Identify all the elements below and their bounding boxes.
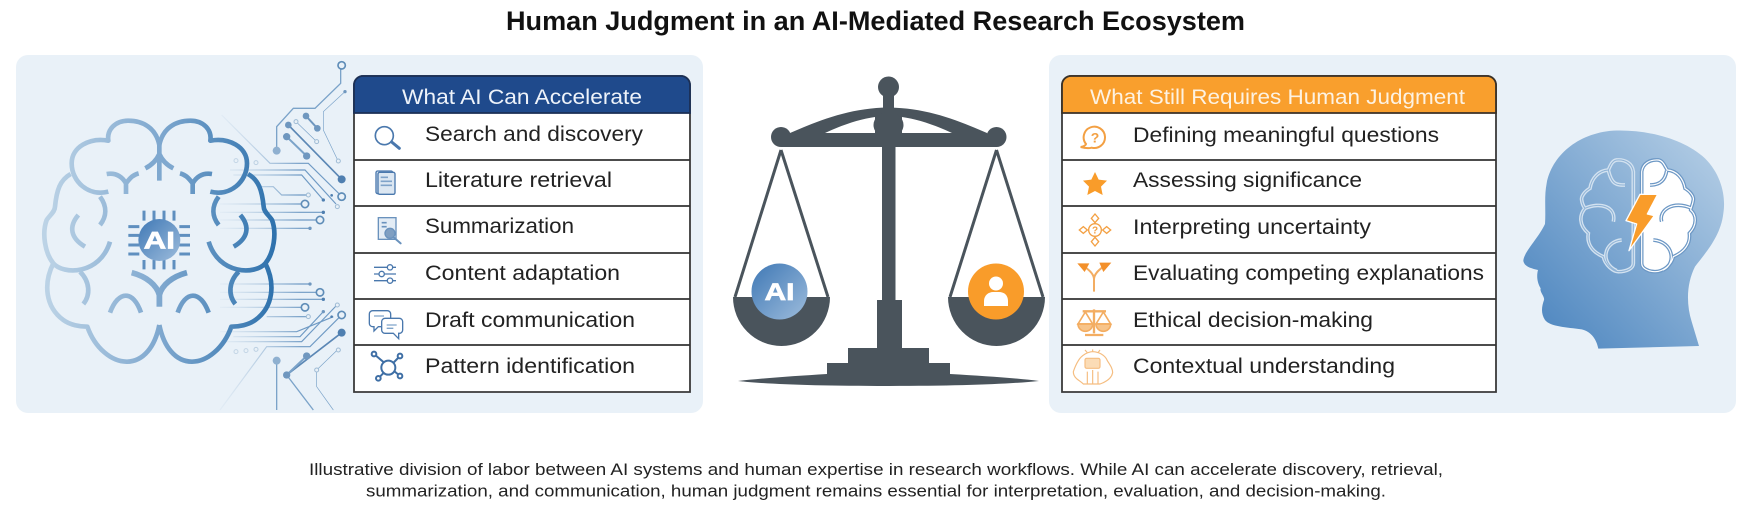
icon: balance scale	[733, 76, 1045, 386]
icon: speech bubbles	[369, 311, 403, 339]
icon: diverging arrows	[1077, 263, 1111, 292]
row: contextual understanding	[1073, 349, 1395, 384]
row: search and discovery: Search and discovery	[425, 122, 643, 146]
icon: network	[372, 352, 402, 381]
table header: What AI Can Accelerate	[402, 86, 642, 109]
row: pattern identification	[372, 352, 635, 381]
icon: small scales	[1078, 309, 1111, 335]
stepped base	[738, 300, 1039, 386]
AI weight: AI	[764, 279, 794, 306]
illustration: human head with brain	[1523, 131, 1724, 349]
left pan	[733, 150, 830, 346]
lightning bolt	[1626, 194, 1658, 251]
row: literature retrieval: Literature retrieval	[425, 168, 612, 192]
row: interpreting uncertainty	[1079, 214, 1371, 246]
icon: question bubble: ?	[1091, 130, 1099, 146]
row: draft communication	[369, 308, 635, 339]
icon: uncertainty compass: ?	[1092, 226, 1098, 237]
icon: uncertainty compass	[1079, 214, 1111, 246]
icon: question bubble	[1081, 127, 1105, 148]
illustration: AI brain with circuits	[44, 62, 347, 410]
row: contextual understanding: Contextual understanding	[1133, 354, 1395, 378]
right pan	[948, 150, 1045, 346]
head silhouette	[1523, 131, 1724, 349]
caption: Illustrative division of labor between AI systems and human expertise in research workflows. While AI can accelerate discovery, retrieval,	[309, 461, 1443, 479]
human weight	[968, 264, 1024, 320]
AI chip: AI	[144, 228, 175, 255]
icon: sliders	[374, 265, 396, 283]
table header: What Still Requires Human Judgment	[1090, 86, 1465, 109]
row: assessing significance	[1083, 168, 1362, 195]
AI weight	[752, 264, 808, 320]
icon: brain in head	[1073, 349, 1113, 384]
icon: document with magnifier	[378, 218, 401, 243]
row: ethical decision-making	[1078, 308, 1373, 335]
row: draft communication: Draft communication	[425, 308, 635, 332]
row: defining meaningful questions: Defining meaningful questions	[1133, 123, 1439, 147]
panel: what still requires human judgment	[1049, 55, 1736, 413]
table: what AI can accelerate	[354, 76, 690, 392]
brain: left hemisphere	[44, 121, 159, 362]
AI chip	[128, 211, 190, 269]
row: evaluating competing explanations: Evaluating competing explanations	[1133, 261, 1484, 285]
table: human judgment	[1062, 76, 1496, 392]
caption: summarization, and communication, human judgment remains essential for interpretation, evaluation, and decision-making.	[366, 482, 1386, 500]
row: ethical decision-making: Ethical decision-making	[1133, 308, 1373, 332]
table header	[1062, 76, 1496, 113]
row: pattern identification: Pattern identification	[425, 354, 635, 378]
brain: right half	[1642, 160, 1695, 272]
row: content adaptation: Content adaptation	[425, 261, 620, 285]
caption	[309, 461, 1443, 500]
title: Human Judgment in an AI-Mediated Research Ecosystem	[506, 6, 1245, 36]
brain: left half	[1581, 160, 1633, 272]
icon: magnifier	[375, 127, 399, 148]
row: interpreting uncertainty: Interpreting uncertainty	[1133, 215, 1371, 239]
icon: star	[1083, 172, 1107, 195]
icon: document	[376, 171, 395, 194]
beam and arch	[790, 108, 987, 147]
row: summarization	[378, 214, 574, 243]
row: summarization: Summarization	[425, 214, 574, 238]
row: literature retrieval	[376, 168, 612, 194]
row: evaluating competing explanations	[1077, 261, 1484, 292]
circuit traces	[220, 115, 339, 410]
row: assessing significance: Assessing significance	[1133, 168, 1362, 192]
panel: what AI can accelerate	[16, 55, 703, 413]
table header	[354, 76, 690, 113]
brain: right hemisphere	[159, 121, 274, 362]
